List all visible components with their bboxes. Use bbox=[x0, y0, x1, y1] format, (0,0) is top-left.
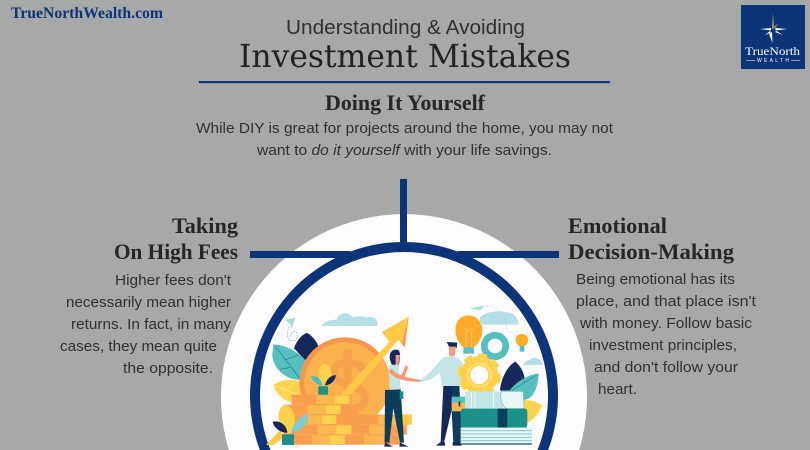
section: Doing It Yourself: want to do it yourself with your life savings. bbox=[256, 143, 552, 159]
section: Emotional Decision-Making: place, and that place isn't bbox=[576, 294, 756, 310]
section: Taking On High Fees: necessarily mean higher bbox=[66, 295, 231, 311]
section: Taking On High Fees bbox=[60, 213, 238, 377]
section: Emotional Decision-Making bbox=[568, 213, 756, 398]
title line: Understanding & Avoiding: Understanding & Avoiding bbox=[286, 17, 525, 39]
logo: True North Wealth: WEALTH bbox=[757, 58, 789, 64]
yellow gear bbox=[460, 356, 499, 394]
compass lines and ring bbox=[250, 179, 559, 450]
dark leaf right bbox=[500, 362, 525, 391]
light bulb large bbox=[455, 315, 482, 354]
section: Taking On High Fees: the opposite. bbox=[123, 361, 213, 377]
man bbox=[420, 342, 468, 446]
paper plane and cloud right bbox=[469, 305, 540, 348]
website label: TrueNorthWealth.com bbox=[11, 5, 164, 22]
teal leaf right bbox=[509, 373, 539, 400]
potted plant bottom left bbox=[273, 405, 309, 445]
section: Doing It Yourself: Doing It Yourself bbox=[325, 90, 486, 115]
dollar sign bbox=[332, 349, 365, 419]
dark leaf back bbox=[294, 333, 319, 360]
woman bbox=[384, 350, 421, 447]
section: Emotional Decision-Making: Decision-Making bbox=[568, 239, 734, 264]
logo: True North Wealth bbox=[741, 5, 805, 69]
section: Emotional Decision-Making: investment principles, bbox=[589, 338, 737, 354]
section: Emotional Decision-Making: heart. bbox=[598, 382, 637, 398]
section: Doing It Yourself bbox=[196, 90, 613, 159]
cloud left bbox=[322, 313, 377, 326]
section: Emotional Decision-Making: and don't follow your bbox=[594, 360, 738, 376]
illustration: finance and handshake bbox=[266, 305, 543, 447]
small cloud right bbox=[523, 358, 543, 365]
book stack bbox=[461, 391, 532, 445]
section: Taking On High Fees: Taking bbox=[172, 213, 238, 238]
logo: True North Wealth: TrueNorth bbox=[745, 46, 800, 58]
section: Emotional Decision-Making: with money. Follow basic bbox=[579, 316, 752, 332]
teal gear bbox=[482, 333, 508, 359]
section: Taking On High Fees: On High Fees bbox=[114, 239, 238, 264]
teal leaf left bbox=[272, 344, 308, 380]
rising arrow bbox=[266, 430, 285, 445]
title divider bbox=[199, 81, 610, 83]
section: Taking On High Fees: cases, they mean quite bbox=[60, 339, 217, 355]
yellow leaf left bbox=[273, 380, 305, 404]
section: Taking On High Fees: Higher fees don't bbox=[115, 273, 231, 289]
section: Taking On High Fees: returns. In fact, in many bbox=[71, 317, 232, 333]
title line: Investment Mistakes: Investment Mistakes bbox=[239, 37, 571, 75]
small light bulb bbox=[516, 328, 529, 352]
coin stacks bbox=[283, 395, 412, 445]
white circle bbox=[221, 214, 587, 450]
paper plane left bbox=[285, 318, 298, 341]
yellow leaf right bbox=[523, 400, 542, 423]
section: Emotional Decision-Making: Being emotional has its bbox=[576, 272, 735, 288]
coin bbox=[300, 337, 390, 428]
section: Emotional Decision-Making: Emotional bbox=[568, 213, 667, 238]
section: Doing It Yourself: While DIY is great for projects around the home, you may not bbox=[196, 121, 613, 137]
potted plant on coins bbox=[311, 364, 336, 395]
